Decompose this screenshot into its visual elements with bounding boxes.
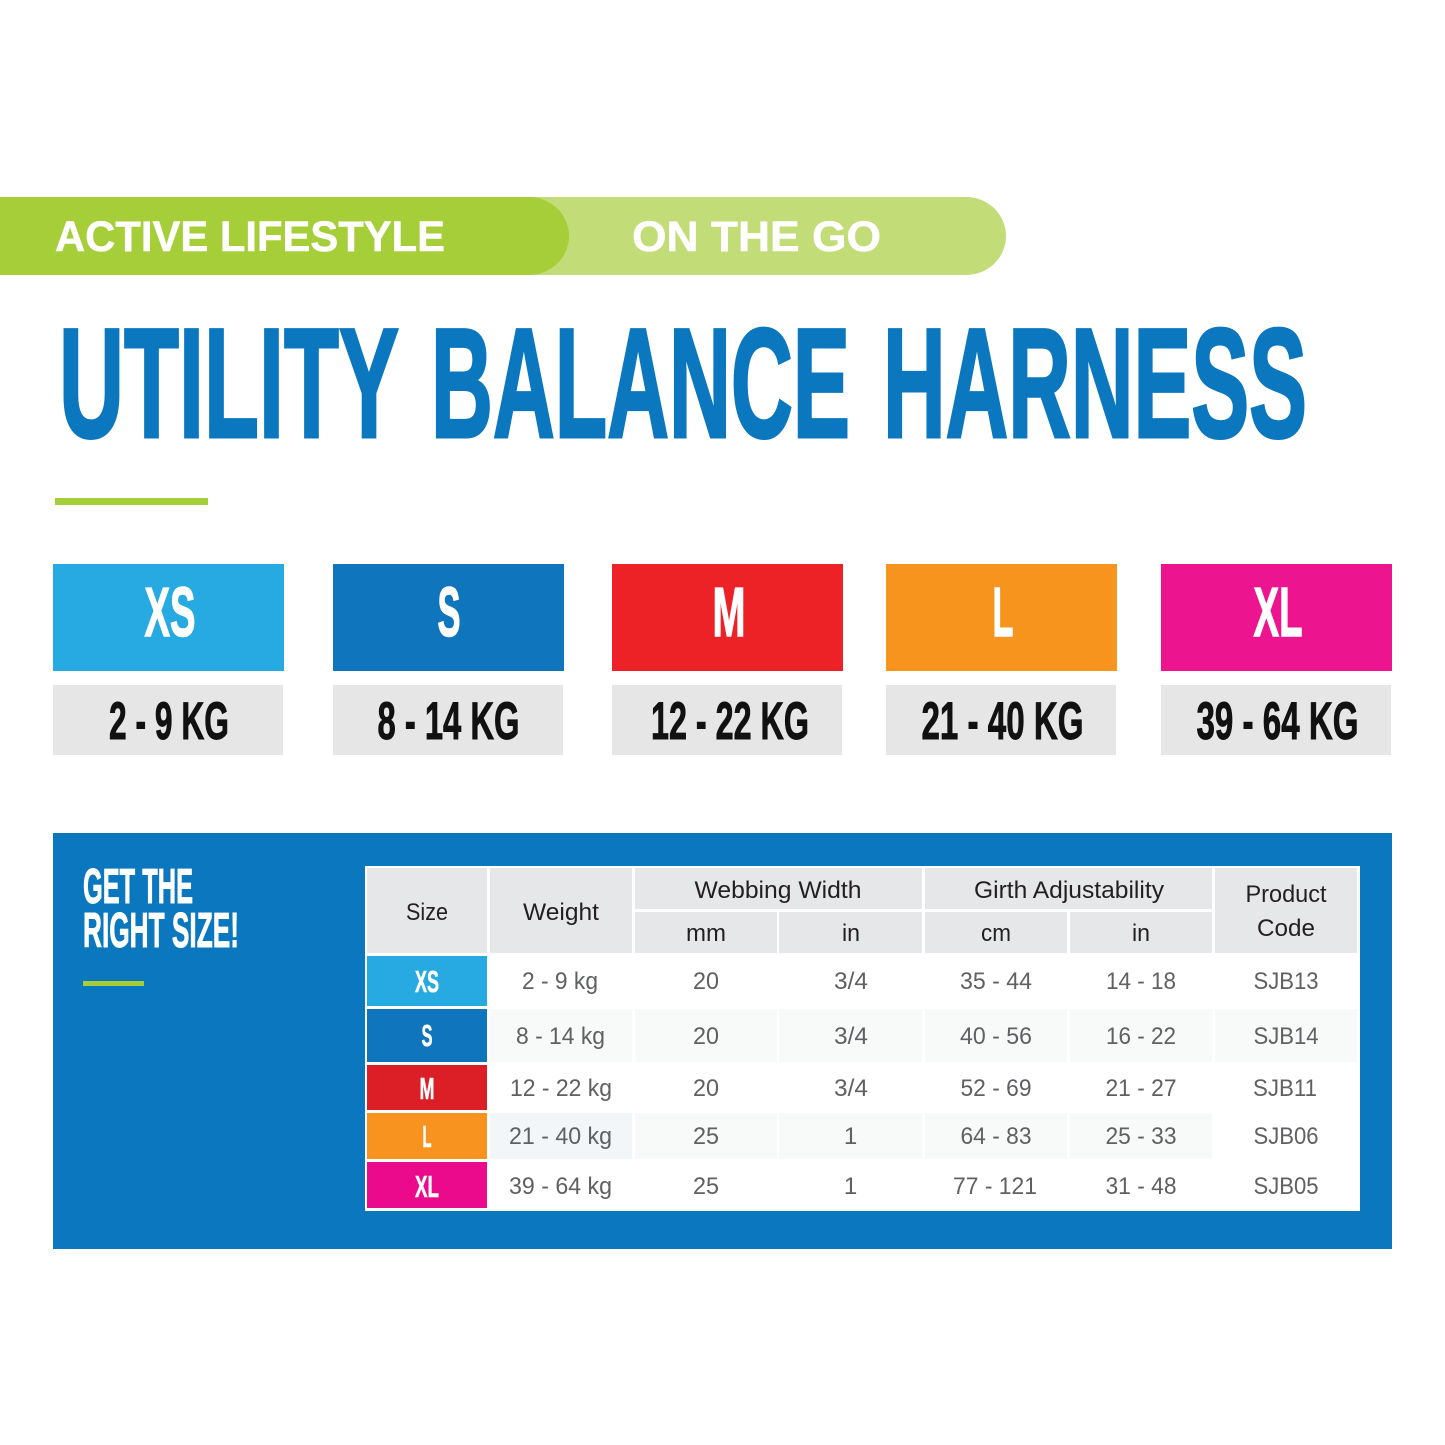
size card: S: 8 - 14 KG <box>378 692 520 751</box>
table row: S: 20 <box>693 1023 719 1050</box>
table header: in <box>842 920 860 947</box>
table row: XL: SJB05 <box>1254 1173 1318 1200</box>
table row: L: 64 - 83 <box>960 1123 1032 1150</box>
table row: XS: SJB13 <box>1254 968 1318 995</box>
title <box>59 297 1307 471</box>
size card: S <box>333 564 564 755</box>
size card: S: S <box>438 573 460 651</box>
table row: XS: 35 - 44 <box>960 968 1032 995</box>
table row: M: 21 - 27 <box>1106 1075 1176 1102</box>
banner segment: on the go <box>500 197 1006 275</box>
table row: L: L <box>422 1119 432 1154</box>
table row: M: 52 - 69 <box>960 1075 1032 1102</box>
table header: Weight <box>523 899 599 926</box>
table row: S: 8 - 14 kg <box>516 1023 605 1050</box>
table row: XS: 20 <box>693 968 719 995</box>
table row: S: S <box>422 1018 432 1053</box>
title: BALANCE <box>431 297 850 471</box>
table row: M <box>367 1065 1317 1110</box>
size card: L: L <box>992 573 1014 651</box>
table row: XL: 1 <box>844 1173 857 1200</box>
table header: cm <box>981 920 1011 947</box>
size card: L <box>886 564 1117 755</box>
table row: XL: 77 - 121 <box>953 1173 1037 1200</box>
table row: XS: XS <box>415 964 439 999</box>
size card: XS <box>53 564 284 755</box>
size card: L: 21 - 40 KG <box>922 692 1084 751</box>
size card: XL: XL <box>1254 573 1302 651</box>
banner segment: active lifestyle: ACTIVE LIFESTYLE <box>55 213 445 261</box>
size card: XS: 2 - 9 KG <box>109 692 229 751</box>
banner segment: on the go: ON THE GO <box>632 213 881 261</box>
panel heading: RIGHT SIZE! <box>83 904 239 958</box>
banner segment: active lifestyle <box>0 197 569 275</box>
table row: M: 3/4 <box>834 1075 868 1102</box>
table row: S: 16 - 22 <box>1106 1023 1176 1050</box>
table header: in <box>1132 920 1150 947</box>
table row: L: 1 <box>844 1123 857 1150</box>
table row: M: 20 <box>693 1075 719 1102</box>
table row: L: 25 <box>693 1123 719 1150</box>
table row: M: 12 - 22 kg <box>510 1075 612 1102</box>
table row: S: 40 - 56 <box>960 1023 1032 1050</box>
panel heading: GET THE <box>83 860 193 914</box>
table row: XS: 3/4 <box>834 968 868 995</box>
table header: mm <box>686 920 726 947</box>
sizing table <box>365 866 1360 1211</box>
table row: S: SJB14 <box>1254 1023 1318 1050</box>
table row: XS <box>367 956 1318 1006</box>
table row: XL: XL <box>415 1169 439 1204</box>
banner: category pill <box>0 197 1006 275</box>
table row: L: 21 - 40 kg <box>509 1123 612 1150</box>
table row: XS: 14 - 18 <box>1106 968 1176 995</box>
table header: Code <box>1257 915 1315 942</box>
table row: S <box>367 1009 1357 1062</box>
table row: XL <box>367 1162 1318 1208</box>
size card: XS: XS <box>144 573 196 651</box>
table header: Webbing Width <box>694 877 862 904</box>
table row: M: M <box>420 1071 434 1106</box>
panel heading <box>83 860 239 958</box>
size card: M: 12 - 22 KG <box>651 692 809 751</box>
size card: M: M <box>712 573 746 651</box>
table row: XL: 31 - 48 <box>1106 1173 1176 1200</box>
table row: XL: 25 <box>693 1173 719 1200</box>
table header: Product <box>1246 881 1327 908</box>
table row: L: SJB06 <box>1254 1123 1318 1150</box>
table row: L: 25 - 33 <box>1106 1123 1176 1150</box>
table row: XL: 39 - 64 kg <box>509 1173 612 1200</box>
table header <box>367 868 1357 953</box>
title: UTILITY <box>59 297 399 471</box>
table row: L <box>367 1113 1318 1159</box>
table row: XS: 2 - 9 kg <box>522 968 598 995</box>
table header: Size <box>406 899 448 926</box>
panel: get the right size <box>53 833 1392 1249</box>
size card: XL <box>1161 564 1392 755</box>
table header: Girth Adjustability <box>974 877 1164 904</box>
table row: S: 3/4 <box>834 1023 868 1050</box>
size card: M <box>612 564 843 755</box>
table row: M: SJB11 <box>1253 1075 1317 1102</box>
